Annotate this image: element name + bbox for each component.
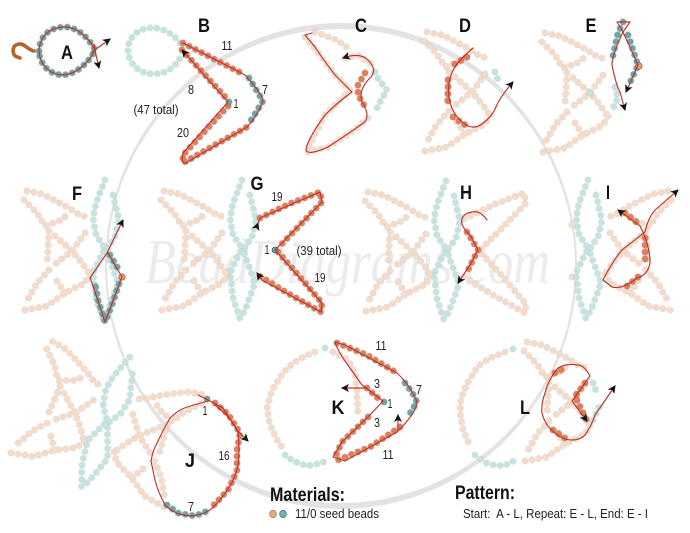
counts: 7: [188, 499, 194, 514]
step K: [267, 338, 422, 466]
letter K: K: [332, 398, 345, 419]
counts: 7: [416, 382, 422, 397]
counts: 3: [374, 376, 380, 391]
peach accent bead: [119, 274, 125, 280]
counts: 1: [388, 396, 392, 411]
thread exit: [94, 44, 99, 68]
counts: 11: [382, 447, 394, 462]
teal chain: [375, 72, 387, 112]
counts: 3: [374, 415, 380, 430]
counts: 19: [272, 189, 282, 204]
counts: 19: [314, 270, 326, 285]
counts: 16: [218, 448, 230, 463]
letter A: A: [61, 43, 73, 64]
peach wing: [24, 191, 90, 310]
letter I: I: [606, 183, 610, 204]
thread: [449, 48, 513, 127]
counts: (47 total): [134, 102, 178, 117]
teal section: [229, 78, 263, 122]
step G: [161, 174, 342, 322]
peach wing: [161, 191, 227, 310]
centre bead: [272, 247, 278, 253]
peach chevron: [305, 32, 373, 152]
peach wing: [605, 191, 671, 310]
step D: [424, 16, 513, 151]
counts: [188, 403, 230, 514]
step L: [460, 342, 615, 466]
counts: 7: [262, 82, 268, 97]
pale teal star: [93, 180, 119, 322]
pattern text: Start: A - L, Repeat: E - L, End: E - I: [463, 506, 648, 521]
counts: (39 total): [296, 243, 342, 258]
materials block: [270, 485, 379, 521]
letter H: H: [460, 183, 472, 204]
peach wing: [542, 33, 608, 152]
counts: 20: [177, 125, 189, 140]
orange chevron: [258, 192, 322, 312]
thread: [542, 364, 615, 440]
thread upward: [623, 32, 638, 92]
orange chevron: [335, 343, 400, 460]
bead swatches: [270, 510, 286, 518]
orange beads: [625, 213, 645, 286]
counts: 1: [234, 96, 238, 111]
orange beads: [553, 368, 587, 438]
letter C: C: [355, 16, 367, 37]
letter D: D: [459, 16, 471, 37]
peach ring: [267, 352, 358, 447]
counts: 1: [264, 242, 270, 257]
step B: [128, 16, 268, 163]
step F: [24, 180, 125, 322]
counts: 8: [188, 82, 194, 97]
thread: [612, 22, 630, 110]
pale teal ring: [128, 28, 180, 74]
letter J: J: [185, 451, 195, 472]
thread: [257, 192, 322, 312]
materials text: 11/0 seed beads: [295, 506, 379, 521]
thread loop: [151, 401, 239, 516]
peach wing: [524, 342, 590, 461]
orange beads: [448, 57, 467, 126]
letter G: G: [250, 174, 264, 195]
orange beads: [467, 232, 478, 272]
thread arrow left: [342, 387, 367, 389]
teal beads: [495, 72, 500, 85]
teal tip beads: [384, 383, 417, 418]
step H: [365, 181, 526, 323]
thread: [90, 220, 123, 322]
left beads: [569, 225, 575, 277]
thread: [182, 43, 263, 163]
teal ring beads: [475, 349, 600, 466]
counts: 11: [222, 38, 232, 53]
materials heading: Materials:: [270, 485, 345, 506]
counts: 11: [376, 338, 386, 353]
thread: [198, 395, 248, 441]
thread: [603, 190, 678, 288]
thread main: [333, 342, 417, 461]
pale teal star: [230, 180, 256, 322]
thread: [458, 212, 487, 283]
orange chevron: [182, 43, 247, 163]
thread: [305, 33, 374, 152]
step E: [542, 16, 642, 152]
watermark text: BeadDiagrams.com: [145, 226, 550, 297]
counts: [134, 38, 268, 140]
counts: [374, 338, 422, 462]
rotated peach and teal star: [6, 330, 208, 519]
pattern block: [455, 483, 648, 521]
peach accent bead: [636, 63, 642, 69]
dark teal beads: [167, 399, 210, 516]
letter B: B: [198, 16, 210, 37]
pale teal star: [576, 180, 602, 322]
step I: [572, 180, 678, 322]
thread loop: [39, 27, 110, 75]
pale teal star: [434, 181, 460, 323]
watermark ring: [105, 23, 577, 509]
peach ring: [460, 352, 505, 446]
pattern heading: Pattern:: [455, 483, 515, 504]
letter E: E: [586, 16, 596, 37]
teal ring beads: [285, 348, 329, 466]
dark teal diamond: [612, 22, 638, 87]
step C: [305, 16, 387, 152]
orange beads: [213, 403, 240, 506]
icon: hook thread end: [13, 44, 34, 58]
thread arrow up: [397, 415, 399, 430]
step A: [13, 27, 110, 75]
counts: [264, 189, 342, 285]
letter F: F: [72, 184, 82, 205]
step J: [6, 330, 248, 519]
peach wing: [424, 32, 490, 151]
counts: 1: [202, 403, 208, 418]
peach wings: [365, 192, 526, 313]
letter L: L: [520, 398, 530, 419]
dark teal diamond: [95, 255, 119, 322]
pale teal beads: [590, 87, 618, 110]
orange beads: [358, 73, 367, 110]
teal bead ring: [39, 27, 95, 75]
